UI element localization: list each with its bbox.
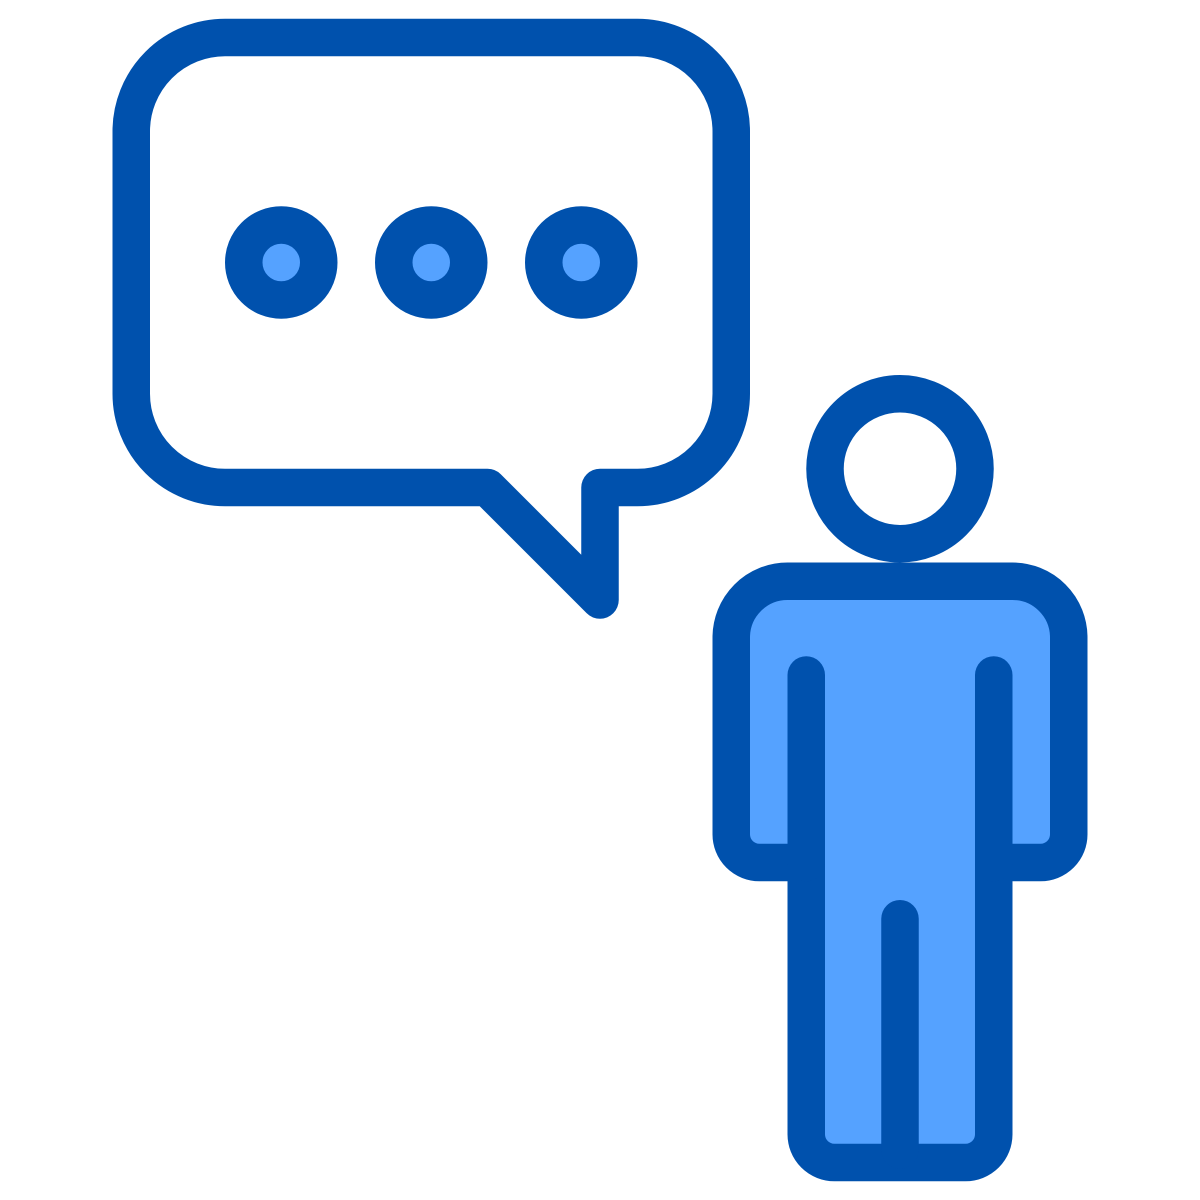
- person head: [825, 394, 975, 544]
- icon: dot right: [544, 225, 619, 300]
- icon: dot left: [244, 225, 319, 300]
- person left arm line: [788, 675, 825, 862]
- icon: dot middle: [394, 225, 469, 300]
- icon: person: [731, 394, 1069, 1162]
- icon: speech bubble: [131, 38, 731, 600]
- person leg line: [881, 919, 919, 1150]
- person body: [731, 581, 1069, 1162]
- person right arm line: [975, 675, 1012, 862]
